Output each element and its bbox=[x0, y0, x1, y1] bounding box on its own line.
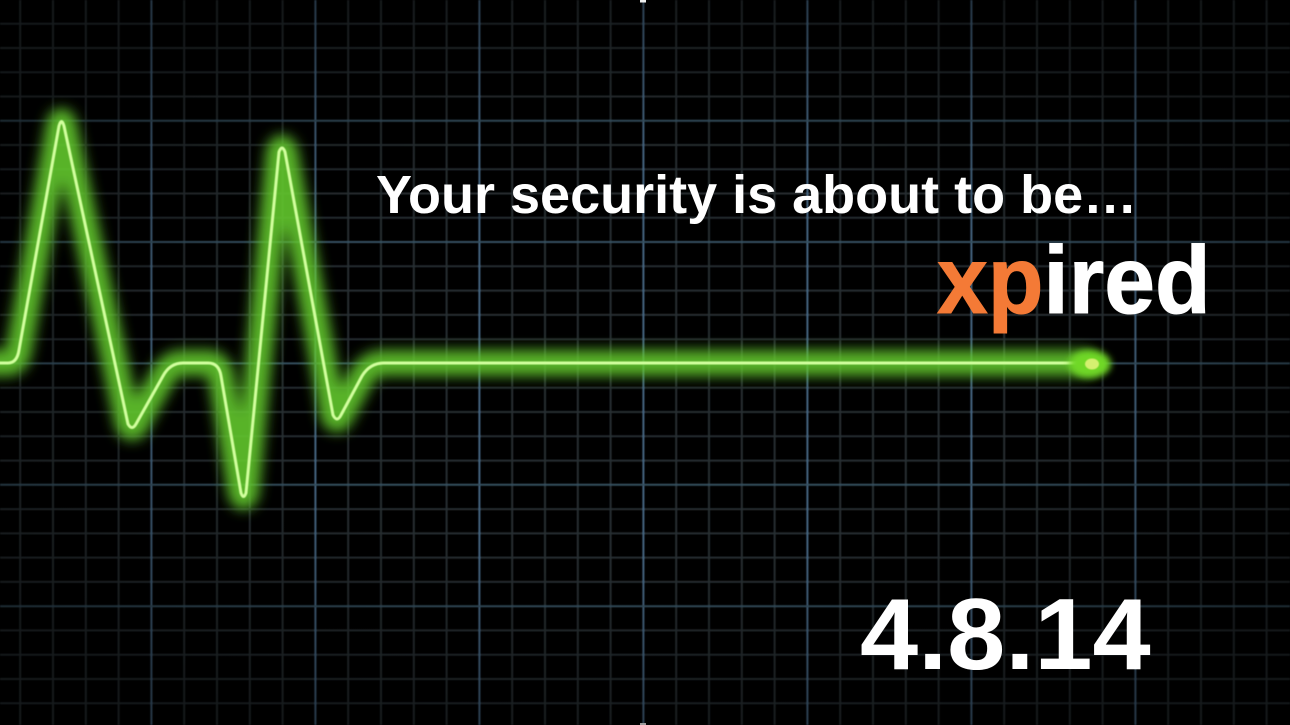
logo: xpired: xpired bbox=[936, 226, 1210, 334]
top marker bbox=[640, 0, 646, 2]
trace outer glow bbox=[0, 122, 1085, 496]
heading: Your security is about to be… bbox=[376, 165, 1137, 225]
trace bright line bbox=[0, 122, 1085, 496]
bottom marker bbox=[640, 723, 646, 725]
trace end point bbox=[1069, 350, 1111, 378]
date: 4.8.14 bbox=[860, 578, 1151, 690]
heartbeat trace bbox=[0, 122, 1085, 496]
